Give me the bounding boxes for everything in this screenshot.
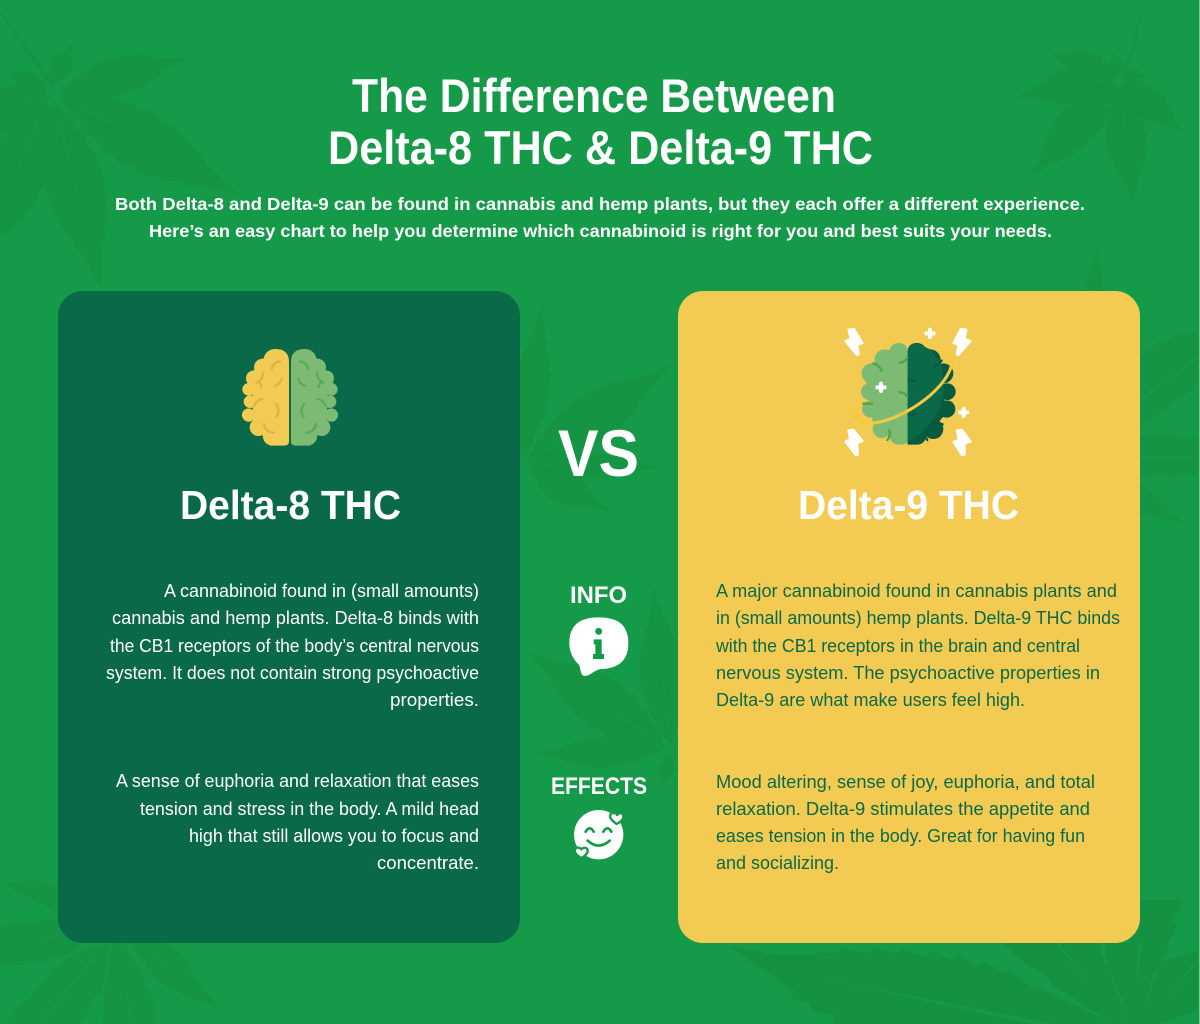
title: The Difference Between	[352, 69, 836, 122]
text: Delta-8 info: A cannabinoid found in (small amounts)	[164, 580, 479, 601]
label: EFFECTS: EFFECTS	[551, 773, 647, 800]
text: Delta-8 effects: tension and stress in the body. A mild head	[140, 798, 479, 819]
panel: Delta-9 THC	[678, 291, 1140, 943]
title	[328, 69, 873, 174]
text: Delta-8 info	[106, 580, 479, 710]
decorative cannabis leaf: centre upper	[504, 301, 685, 527]
text: Delta-9 info: nervous system. The psychoactive properties in	[716, 662, 1100, 683]
text: Delta-8 info: properties.	[390, 689, 479, 710]
panel: Delta-8 THC	[58, 291, 520, 943]
text: Delta-9 info: with the CB1 receptors in the brain and central	[715, 635, 1080, 656]
text: Delta-9 effects: Mood altering, sense of joy, euphoria, and total	[716, 771, 1095, 792]
decorative cannabis leaf: right side	[1130, 332, 1198, 522]
VS label: VS	[558, 416, 639, 490]
decorative cannabis leaf: bottom right	[730, 900, 1198, 1024]
heading: Delta-8 THC: Delta-8 THC	[180, 482, 401, 528]
icon: Delta-9 brain with sparkles	[845, 329, 971, 455]
subtitle	[115, 194, 1085, 241]
text: Delta-9 effects: and socializing.	[716, 852, 839, 873]
subtitle: Both Delta-8 and Delta-9 can be found in cannabis and hemp plants, but they each offer a different experience.	[115, 194, 1085, 214]
long leaflet	[730, 947, 1113, 1024]
heading: Delta-9 THC: Delta-9 THC	[798, 482, 1019, 528]
decorative cannabis leaf: centre lower	[512, 585, 694, 788]
icon: Delta-8 brain	[242, 349, 338, 446]
icon: smiling face with hearts	[574, 810, 623, 859]
text: Delta-9 effects	[716, 771, 1095, 873]
subtitle: Here’s an easy chart to help you determine which cannabinoid is right for you and best suits your needs.	[149, 221, 1052, 241]
text: Delta-9 effects: eases tension in the body. Great for having fun	[716, 825, 1085, 846]
text: Delta-8 effects: concentrate.	[377, 852, 479, 873]
icon: info speech bubble	[569, 617, 628, 676]
text: Delta-8 effects	[116, 770, 479, 873]
remaining leaflets	[1003, 900, 1198, 1024]
text: Delta-8 effects: high that still allows you to focus and	[189, 825, 479, 846]
text: Delta-8 info: cannabis and hemp plants. Delta-8 binds with	[112, 607, 479, 628]
text: Delta-8 effects: A sense of euphoria and relaxation that eases	[116, 770, 479, 791]
text: Delta-9 info: Delta-9 are what make users feel high.	[716, 689, 1025, 710]
decorative cannabis leaf: bottom left	[0, 881, 220, 1024]
decorative cannabis leaf: top right	[1014, 12, 1193, 443]
label: INFO: INFO	[570, 582, 627, 609]
text: Delta-8 info: the CB1 receptors of the body’s central nervous	[110, 635, 479, 656]
text: Delta-9 info: A major cannabinoid found in cannabis plants and	[716, 580, 1117, 601]
text: Delta-8 info: system. It does not contain strong psychoactive	[106, 662, 479, 683]
title: Delta-8 THC & Delta-9 THC	[328, 121, 873, 174]
text: Delta-9 info: in (small amounts) hemp plants. Delta-9 THC binds	[716, 607, 1120, 628]
decorative cannabis leaf: top left	[0, 13, 256, 297]
text: Delta-9 effects: relaxation. Delta-9 stimulates the appetite and	[716, 798, 1090, 819]
text: Delta-9 info	[715, 580, 1120, 710]
